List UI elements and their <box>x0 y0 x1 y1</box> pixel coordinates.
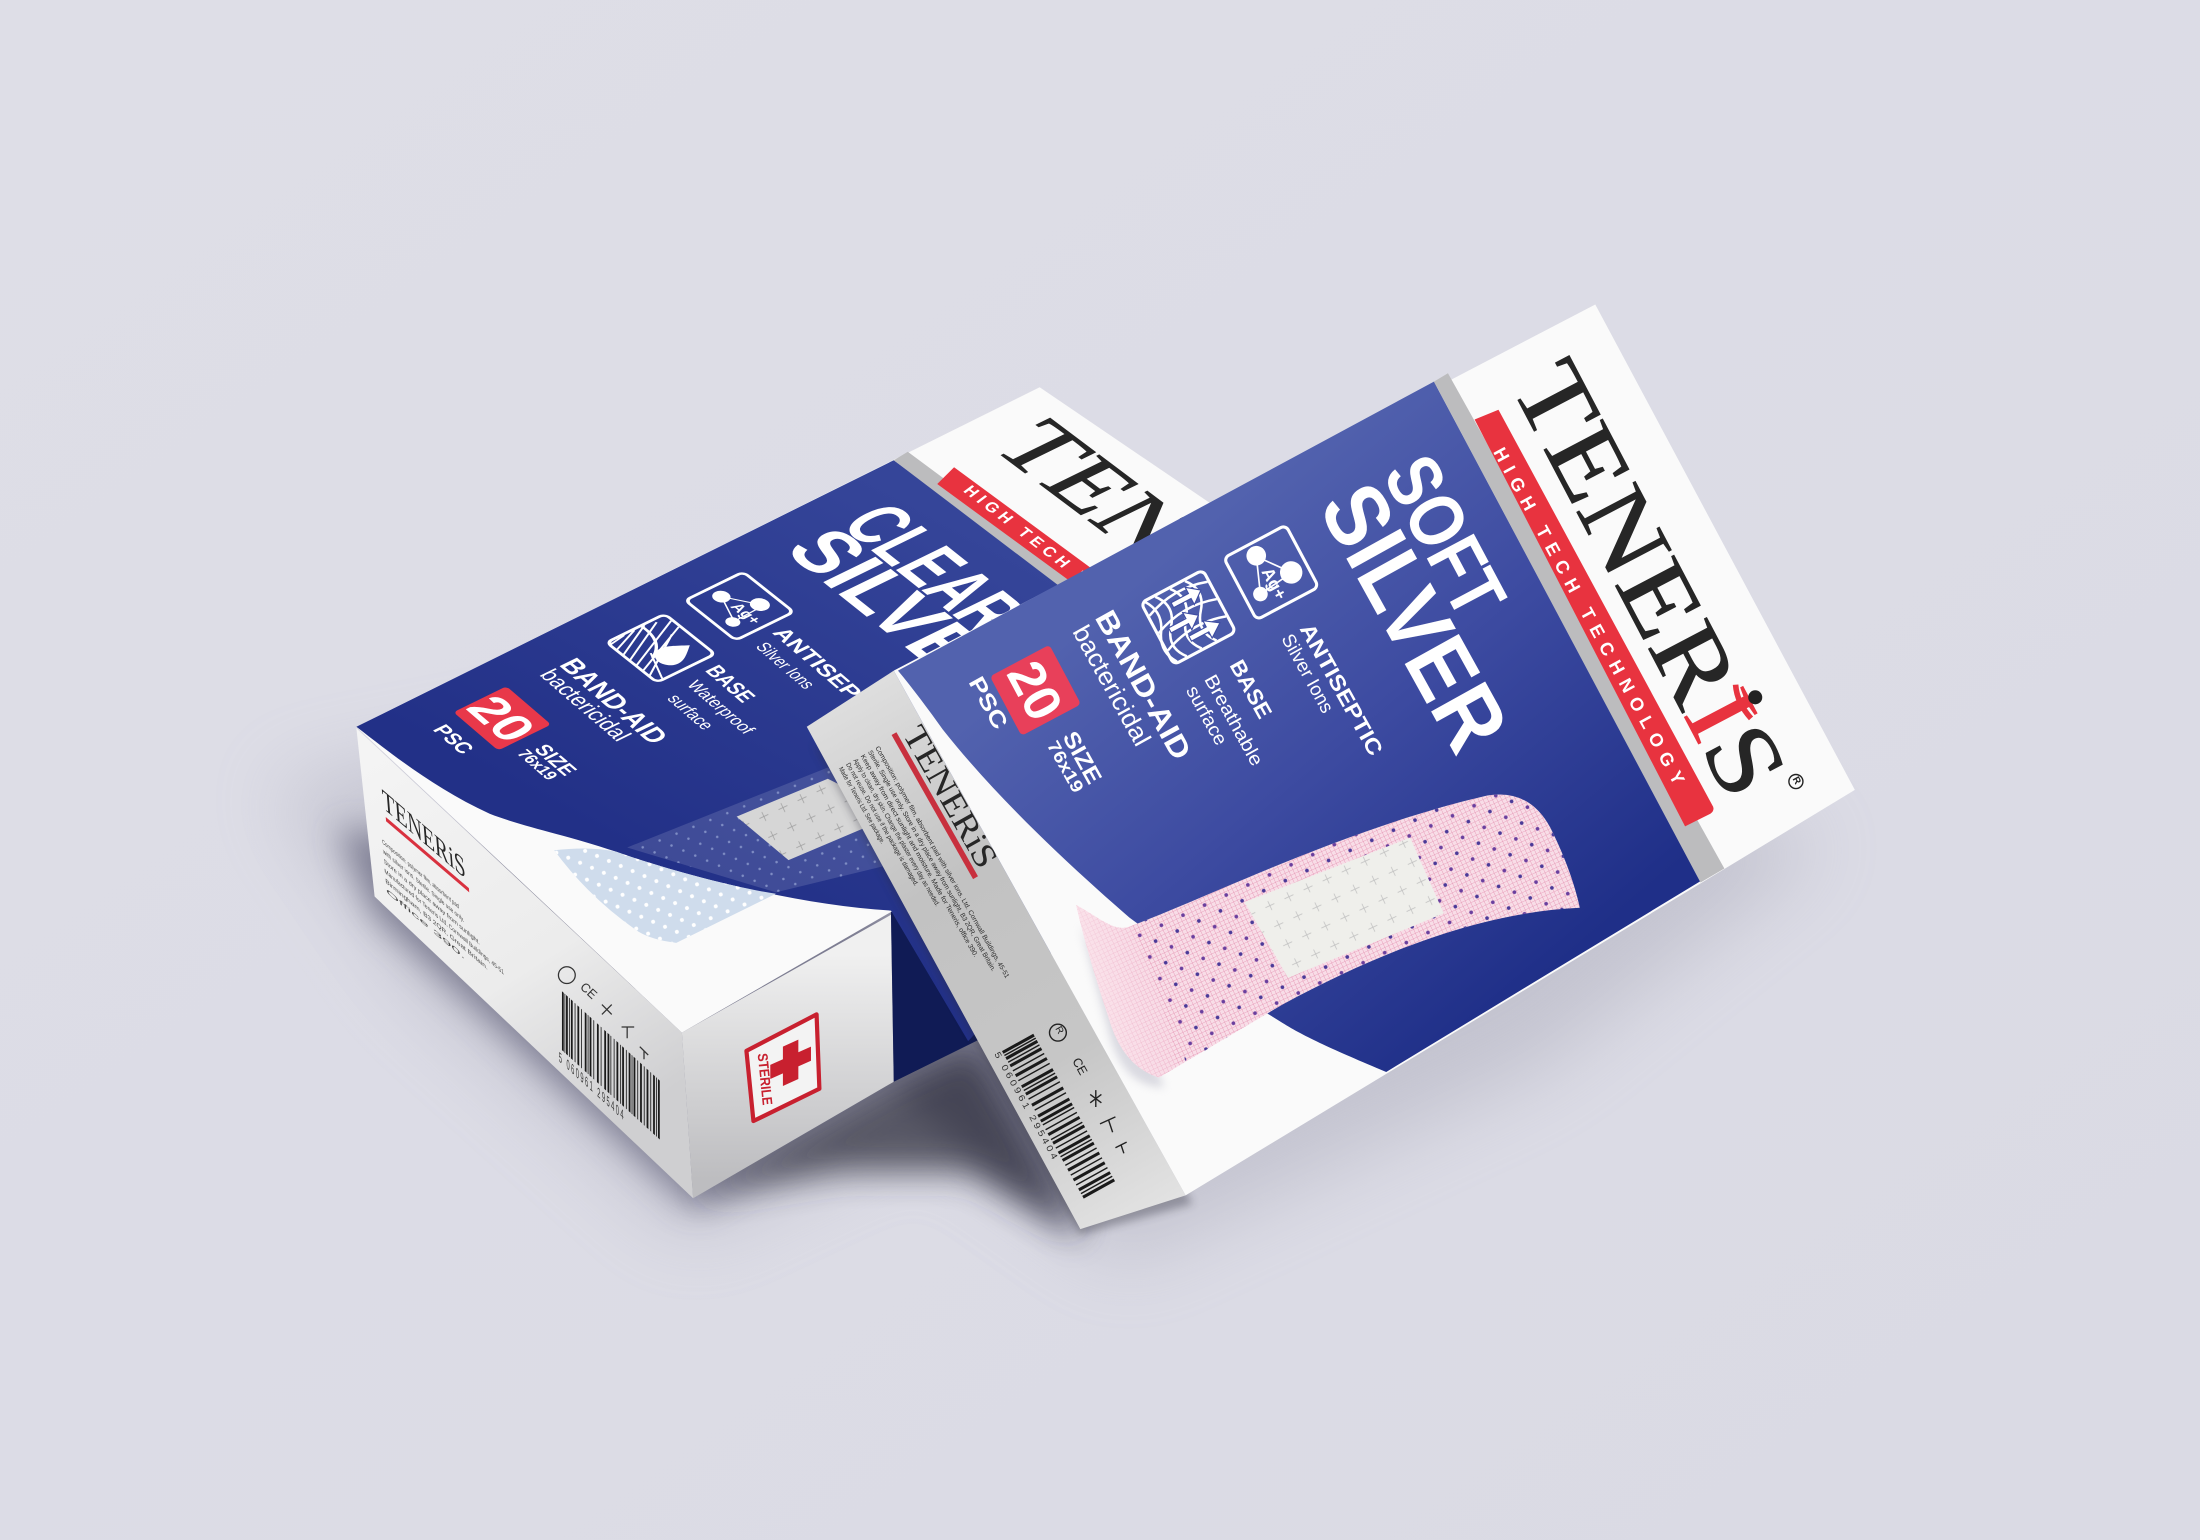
count badge: 20 <box>995 652 1074 730</box>
labels <box>428 624 896 783</box>
side small print: Composition: polymer film, absorbent pad <box>382 838 459 911</box>
labels: Silver Ions <box>751 639 820 691</box>
side small print: Keep away from direct sunlight and moisture. Made for Teneris, office 390. <box>859 754 979 959</box>
labels: Silver Ions <box>1277 631 1337 717</box>
side small print: Store in a dry place away from sunlight. <box>383 858 480 947</box>
product name: SILVER <box>1300 468 1527 768</box>
blue panel with curved lower edge <box>898 382 1701 1072</box>
side small print: Office 390. <box>386 887 466 962</box>
certification symbols: CE <box>577 980 600 1002</box>
side small print <box>381 838 506 997</box>
side logo: TENERiS <box>895 720 1005 875</box>
red ribbon: HIGH TECH TECHNOLOGY <box>1489 444 1691 792</box>
labels: 76x19 <box>1043 737 1088 796</box>
contact shadow <box>814 744 1193 1235</box>
red ribbon: HIGH TECH TECHNOLOGY <box>959 483 1213 678</box>
certification symbols: CE <box>1069 1055 1090 1078</box>
side small print: Composition: polymer film, absorbent pad with silver ions. Ltd. Cornwall Buildings, 45-51 <box>873 745 1010 980</box>
labels: PSC <box>964 672 1013 733</box>
icon: silver ions <box>685 572 794 640</box>
labels: surface <box>663 691 719 732</box>
labels: ANTISEPTIC <box>767 624 896 726</box>
side logo: TENERiS <box>381 783 467 886</box>
icon: silver ions <box>1224 525 1319 620</box>
labels: BAND-AID <box>553 654 675 748</box>
cast shadows <box>274 702 1824 1263</box>
certification symbols <box>558 967 648 1059</box>
side small print: Sterile. Single use only. Store in a dry place away from sunlight, B3 2QR, Great Britain. <box>866 749 997 973</box>
transparent plaster <box>554 767 926 943</box>
labels: BAND-AID <box>1088 605 1197 766</box>
blue panel with curved lower edge <box>356 460 1263 1041</box>
icon: silver ions: Ag+ <box>726 601 765 627</box>
labels: BASE <box>1225 655 1277 723</box>
barcode <box>992 1033 1114 1203</box>
barcode: 5 060961 295404 <box>559 1050 625 1125</box>
labels: surface <box>1181 683 1231 749</box>
barcode: 5 060961 295404 <box>992 1050 1061 1164</box>
sterile mark: STERILE <box>755 1052 776 1106</box>
icon: breathable base <box>1140 570 1236 665</box>
labels: SIZE <box>1058 727 1107 788</box>
icon: waterproof base <box>607 614 715 682</box>
labels: Waterproof <box>683 677 761 737</box>
top face <box>356 387 1320 1033</box>
labels: SIZE <box>529 741 581 779</box>
side small print: Do not reuse. Do not use if the package is damaged. <box>844 762 919 888</box>
end face <box>682 915 894 1198</box>
side small print: Birmingham, B3 2QR, Great Britain. <box>385 878 488 972</box>
labels: 76x19 <box>513 747 562 783</box>
sterile mark <box>746 1014 819 1121</box>
side small print: Made for Teneris Ltd. See package. <box>837 766 886 845</box>
certification symbols <box>1049 1024 1127 1153</box>
side small print: with silver ions. Sterile. Single use only. <box>382 847 464 924</box>
navy wrap on end face <box>891 898 1010 1082</box>
logo: R <box>1790 775 1803 786</box>
long side face <box>807 671 1186 1229</box>
pink plaster <box>1076 794 1580 1087</box>
top face <box>894 304 1855 1195</box>
product name: CLEAR <box>823 493 1045 644</box>
side small print: Apply to clean, dry skin. Change the plaster every day as needed. <box>851 758 941 908</box>
logo: TENERiS <box>969 407 1390 696</box>
product name: SILVER <box>767 517 1046 713</box>
icon: silver ions: Ag+ <box>1258 564 1291 603</box>
product name: SOFT <box>1367 442 1522 631</box>
box: Soft Silver <box>807 304 1855 1235</box>
labels: BASE <box>700 662 761 706</box>
labels: bactericidal <box>1067 621 1156 751</box>
count badge: 20 <box>455 688 549 749</box>
grey band <box>1434 373 1724 883</box>
barcode <box>559 988 659 1156</box>
labels: bactericidal <box>533 666 637 745</box>
labels: ANTISEPTIC <box>1295 619 1388 760</box>
box: Clear Silver <box>356 387 1390 1198</box>
logo: TENERIS <box>1490 343 1810 815</box>
labels <box>964 605 1388 796</box>
certification symbols: R <box>1052 1025 1066 1036</box>
side small print: Manufactured for Teneris Ltd, Cornwall Buildings, 45-51 <box>384 868 505 977</box>
grey band <box>894 452 1207 688</box>
left side face <box>356 728 693 1198</box>
labels: Breathable <box>1199 671 1267 770</box>
labels: PSC <box>428 722 478 757</box>
